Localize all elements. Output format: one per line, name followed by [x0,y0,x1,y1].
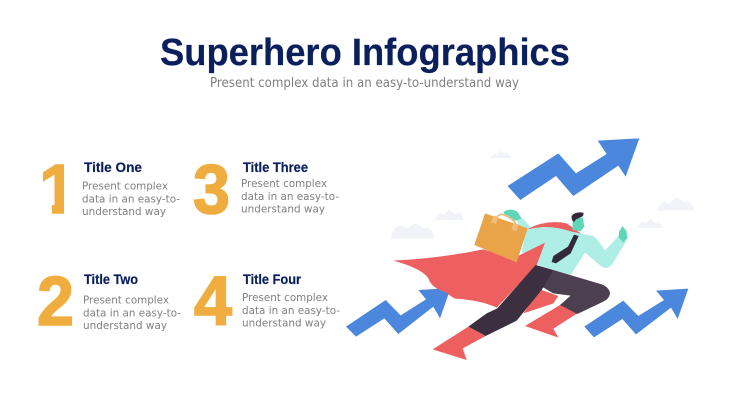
item: title two [37,262,181,340]
body text: title one: understand way [82,205,166,218]
body text: title three: data in an easy-to- [241,190,339,203]
number 4: 4 [194,262,232,340]
body text: title two: understand way [83,319,167,332]
briefcase [474,213,528,262]
boot: front [433,327,486,360]
heading: title four: Title Four [243,271,301,287]
subtitle: Present complex data in an easy-to-understand way [210,76,519,91]
hand [619,226,627,243]
cape [393,243,545,308]
torso and arm [522,227,626,275]
number 2: 2 [37,262,74,340]
hand: holding briefcase [503,210,522,221]
arrow: top [508,138,639,200]
leg: front [468,265,553,336]
item: title three [193,150,339,228]
body text: title two: Present complex [83,294,169,306]
body text: title one [82,180,180,218]
body text: title two: data in an easy-to- [83,306,181,320]
body text: title one: Present complex [82,180,168,192]
arrow: left [346,288,451,337]
hair [572,212,584,222]
body text: title three: understand way [241,202,325,216]
leg: rear [542,270,610,314]
arm: raised to briefcase [516,217,533,245]
heading: title three: Title Three [243,159,308,175]
number 1: 1 [39,150,78,228]
boot: rear [525,305,577,338]
tie [552,235,579,263]
body text: title four: understand way [242,316,326,330]
body text: title one: data in an easy-to- [82,192,180,206]
cape: lower fold [523,289,558,313]
arrow: right [584,289,688,337]
number 3: 3 [193,150,230,228]
body text: title two [83,294,181,332]
clouds [391,151,694,239]
cape: collar [528,222,582,234]
body text: title four [242,291,340,330]
illustration: superhero businessman with arrows [346,138,694,360]
body text: title four: Present complex [242,291,328,304]
body text: title three [241,177,339,216]
heading: title one: Title One [84,159,142,175]
title: Superhero Infographics [160,32,570,74]
heading: title two: Title Two [84,271,138,287]
head [573,217,584,231]
item: title four [194,262,340,340]
body text: title four: data in an easy-to- [242,304,340,317]
item: title one [43,162,180,217]
body text: title three: Present complex [241,177,327,190]
